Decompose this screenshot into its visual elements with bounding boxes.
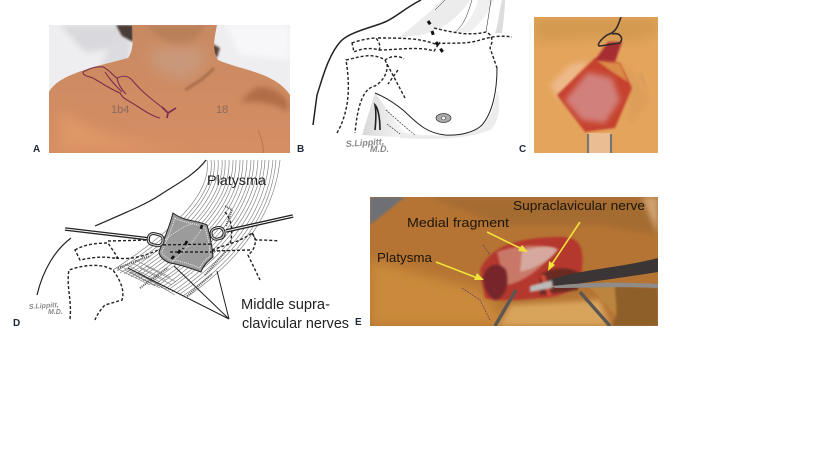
panel C: wound photo <box>534 17 658 153</box>
panel A: photo of clavicle markings <box>49 25 290 153</box>
lower body line <box>37 238 71 295</box>
leader lines <box>128 266 229 319</box>
bottom retractor <box>588 134 611 153</box>
nipple icon <box>436 114 451 122</box>
panel D: retracted flap line drawing: M.D. <box>48 309 63 316</box>
fold and lines <box>375 105 380 130</box>
label B: B <box>297 144 304 155</box>
label: Middle supraclavicular nerves: Middle supra- <box>241 296 330 313</box>
text labels: Medial fragment <box>407 215 509 230</box>
grey bone flap <box>159 213 213 272</box>
upper shoulder line <box>95 160 206 226</box>
text labels: Platysma <box>377 250 433 265</box>
panel E: surgical photo <box>370 197 658 326</box>
grey muscle shading <box>398 0 470 38</box>
breast outline <box>375 68 497 135</box>
label A: A <box>33 144 40 155</box>
forceps <box>550 258 658 287</box>
dashed anatomy lines <box>75 243 118 260</box>
label D: D <box>13 318 20 329</box>
handwritten side marks: 1b4 <box>111 104 129 116</box>
right retractor <box>226 216 293 231</box>
dashed clavicle and nerves <box>352 38 380 52</box>
panel A: photo of clavicle markings: 18 <box>216 104 228 116</box>
top retractor <box>598 17 622 46</box>
signature: S.Lippitt, <box>29 302 59 311</box>
left retractor <box>65 229 150 239</box>
outer body outline <box>313 0 421 125</box>
panel D: retracted flap line drawing <box>29 160 349 332</box>
label: Platysma: Platysma <box>207 172 266 188</box>
panel B: shoulder line drawing: M.D. <box>370 144 389 154</box>
yellow arrows <box>436 222 580 279</box>
purple marks <box>462 245 490 320</box>
platysma fibers <box>113 160 280 297</box>
text labels: Supraclavicular nerve <box>513 198 645 213</box>
label E: E <box>355 317 362 328</box>
thin muscle lines <box>435 0 491 33</box>
label C: C <box>519 144 526 155</box>
wound <box>480 237 583 300</box>
signature: S.Lippitt, <box>345 136 385 149</box>
nerve hatching <box>118 206 232 296</box>
incision markings <box>83 67 176 118</box>
label: Middle supraclavicular nerves <box>241 296 349 332</box>
label: Middle supraclavicular nerves: clavicular nerves <box>242 315 349 332</box>
dark fracture marks <box>428 21 444 54</box>
text labels <box>377 198 645 265</box>
panel B: shoulder line drawing <box>313 0 512 154</box>
retractors <box>495 290 610 326</box>
